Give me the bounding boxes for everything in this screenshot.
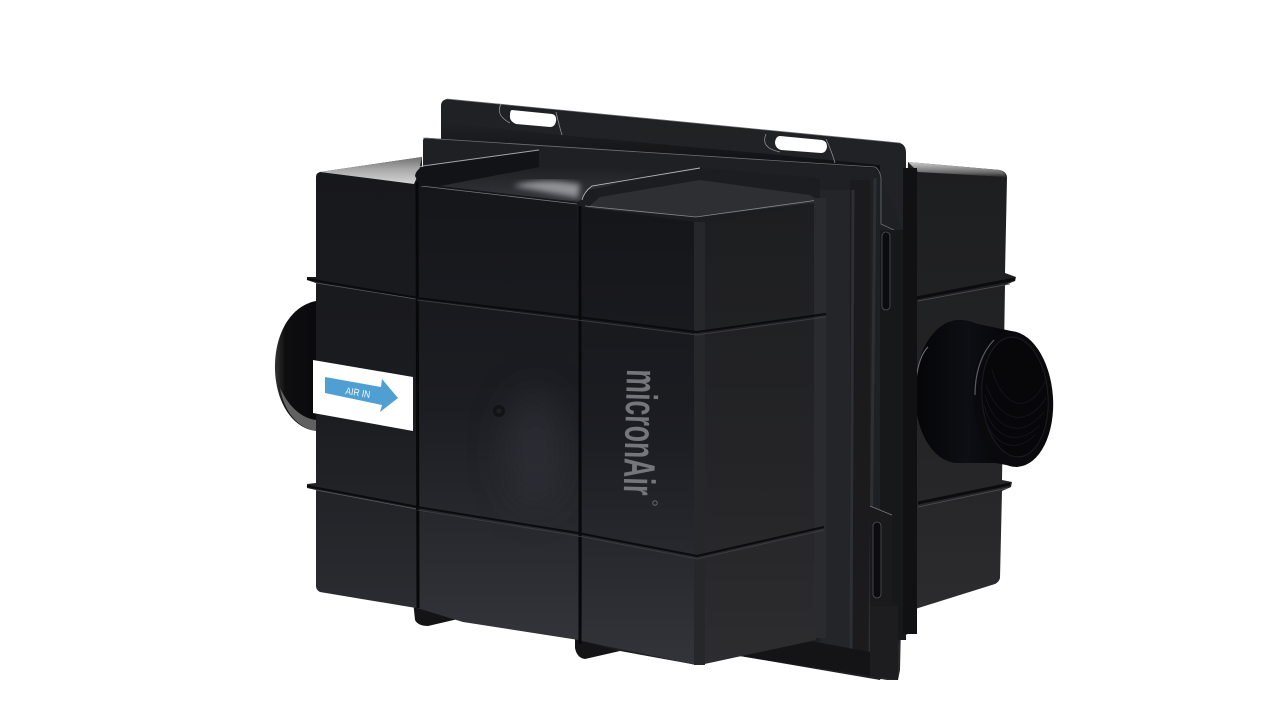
mounting bolt <box>493 405 505 417</box>
front block bottom fins <box>413 600 870 676</box>
top face of centre block with reflection <box>440 167 650 202</box>
right front block <box>577 168 826 665</box>
shadow band under flange <box>423 122 880 172</box>
second flange step <box>423 138 917 680</box>
brand logo text <box>614 369 666 505</box>
mounting flange plate with slots <box>423 99 906 680</box>
right threaded outlet port <box>915 320 1058 470</box>
right side box <box>895 162 1016 640</box>
centre front panel <box>415 150 585 641</box>
lower clip tab <box>870 506 892 606</box>
arrow text: AIR IN <box>345 386 371 401</box>
left air inlet port <box>275 301 316 431</box>
upper clip tab <box>882 232 890 310</box>
left end box <box>307 157 422 609</box>
divider channels and horizontal ribs <box>417 182 826 644</box>
air-in label <box>313 360 413 431</box>
brand logo text: micronAir <box>614 369 666 496</box>
right flange column <box>880 230 906 640</box>
